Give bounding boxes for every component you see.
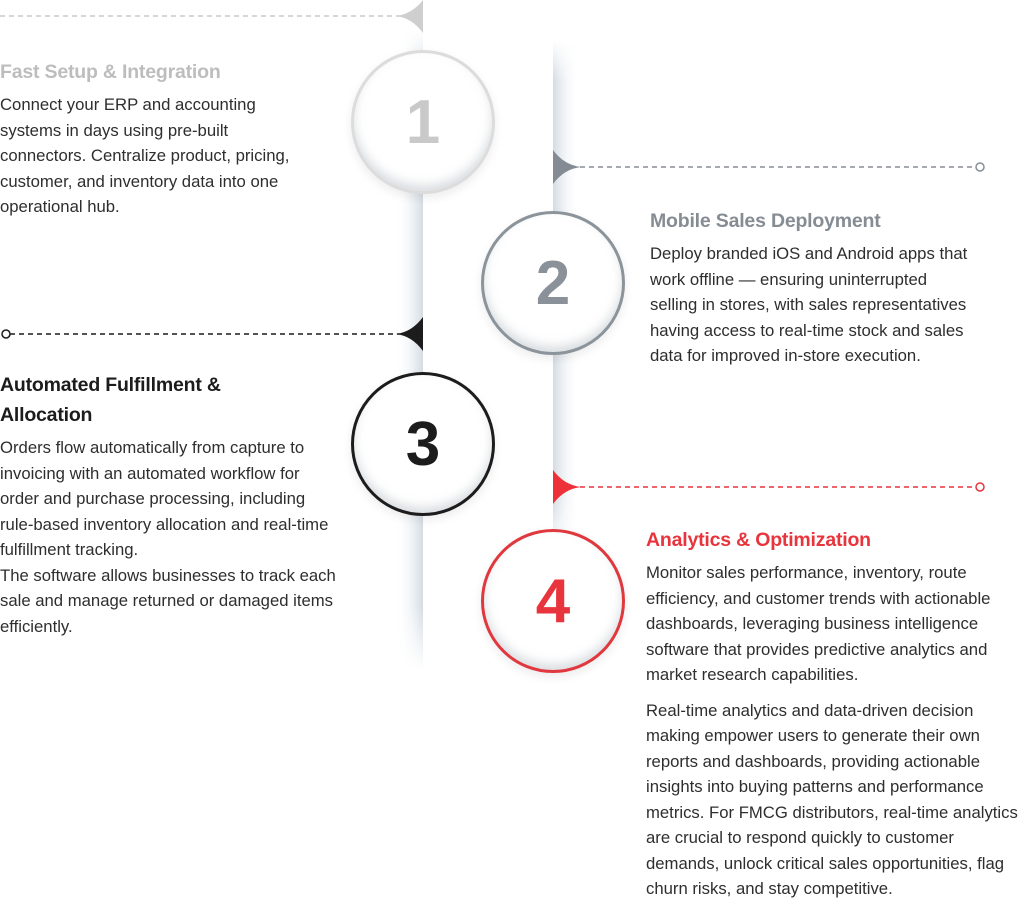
text: step 3: Allocation (0, 404, 92, 426)
text: step 4: making empower users to generate their own (646, 726, 980, 745)
text: step 2: selling in stores, with sales representatives (650, 295, 966, 314)
text: step 3: Automated Fulfillment & (0, 374, 221, 396)
text: step 1 (0, 61, 289, 216)
circle 4: 4 (536, 566, 570, 636)
circle 1: 1 (406, 88, 440, 156)
text: step 2: having access to real-time stock and sales (650, 320, 964, 340)
text: step 4: Real-time analytics and data-driven decision (646, 700, 973, 720)
text: step 4 (646, 529, 1018, 898)
text: step 4: churn risks, and stay competitive. (646, 879, 893, 898)
text: step 2 (650, 210, 968, 365)
text: step 3: order and purchase processing, including (0, 489, 305, 508)
circle 4 (481, 529, 625, 673)
text: step 4: demands, unlock critical sales opportunities, flag (646, 854, 1004, 872)
text: step 3: Orders flow automatically from capture to (0, 438, 304, 457)
text: step 1: Fast Setup & Integration (0, 61, 221, 83)
text: step 4: Analytics & Optimization (646, 529, 871, 551)
text: step 3: invoicing with an automated workflow for (0, 464, 300, 482)
circle 3 (351, 372, 495, 516)
text: step 4: are crucial to respond quickly to customer (646, 828, 954, 847)
text: step 3: rule-based inventory allocation and real-time (0, 514, 328, 534)
text: step 4: reports and dashboards, providing actionable (646, 752, 980, 770)
text: step 1: operational hub. (0, 197, 120, 216)
text: step 4: efficiency, and customer trends with actionable (646, 588, 990, 608)
text: step 4: dashboards, leveraging business intelligence (646, 614, 978, 633)
circle 3: 3 (406, 410, 440, 478)
text: step 3: The software allows businesses to track each (0, 566, 336, 584)
text: step 1: Connect your ERP and accounting (0, 95, 256, 114)
text: step 1: systems in days using pre-built (0, 120, 228, 140)
text: step 3: efficiently. (0, 616, 73, 636)
text: step 2: data for improved in-store execution. (650, 346, 921, 365)
text: step 2: Mobile Sales Deployment (650, 210, 881, 232)
text: step 4: market research capabilities. (646, 665, 858, 684)
text: step 3: fulfillment tracking. (0, 540, 138, 559)
text: step 1: customer, and inventory data into one (0, 172, 278, 190)
circle 2 (481, 211, 625, 355)
circle 2: 2 (536, 248, 570, 318)
circle 1 (351, 50, 495, 194)
text: step 3: sale and manage returned or damaged items (0, 591, 333, 610)
text: step 4: metrics. For FMCG distributors, real-time analytics (646, 802, 1018, 822)
text: step 2: Deploy branded iOS and Android apps that (650, 244, 967, 263)
text: step 4: insights into buying patterns and performance (646, 777, 984, 796)
text: step 4: software that provides predictive analytics and (646, 640, 987, 658)
text: step 4: Monitor sales performance, inventory, route (646, 563, 967, 582)
text: step 3 (0, 374, 336, 636)
text: step 1: connectors. Centralize product, pricing, (0, 146, 289, 165)
text: step 2: work offline — ensuring uninterrupted (650, 270, 927, 288)
